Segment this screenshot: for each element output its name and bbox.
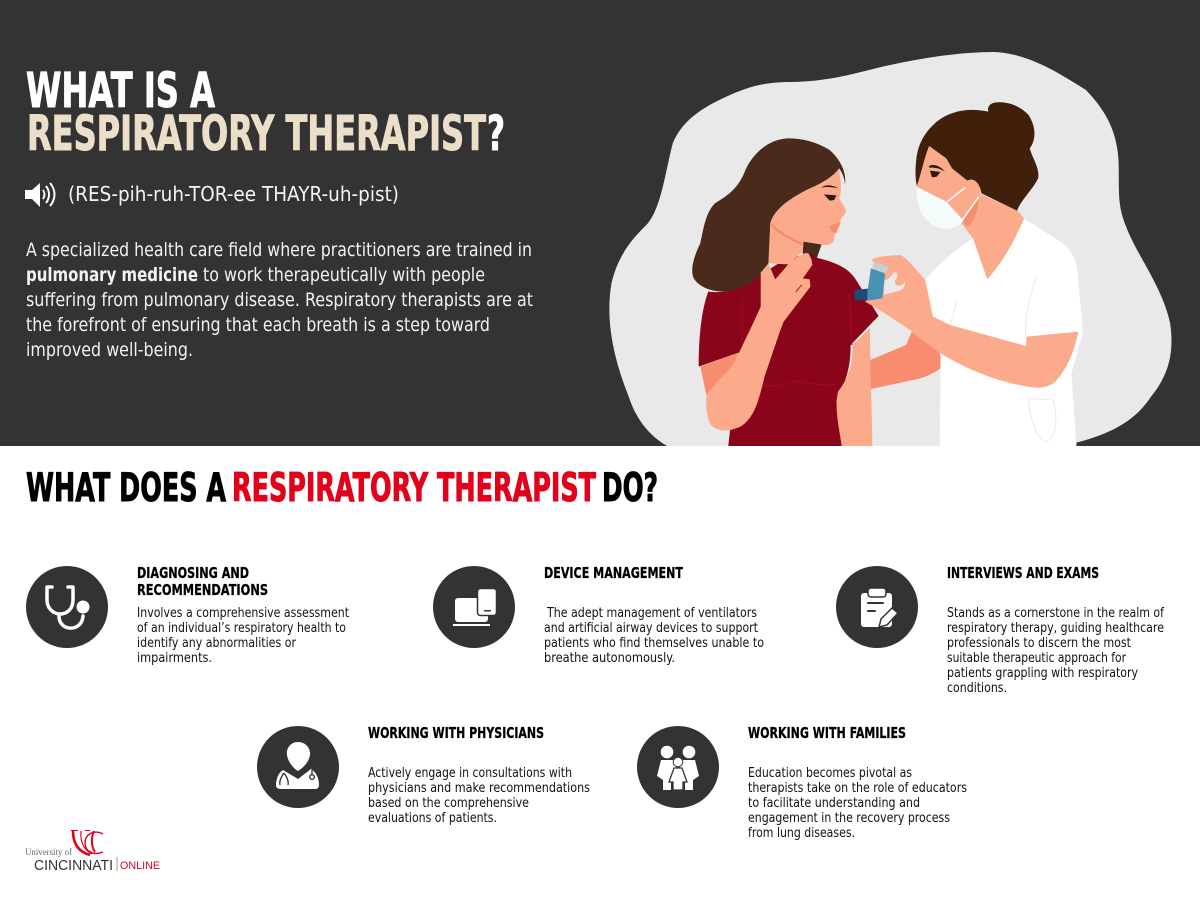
description: breathe autonomously.	[544, 651, 675, 666]
section heading	[26, 466, 658, 511]
nurse uniform	[925, 218, 1083, 447]
description: and artificial airway devices to support	[544, 621, 758, 636]
panel: device management	[433, 564, 764, 666]
section heading: DO?	[602, 466, 658, 511]
description: Stands as a cornerstone in the realm of	[947, 606, 1164, 621]
description: evaluations of patients.	[368, 811, 497, 826]
online text: ONLINE	[120, 860, 160, 872]
title: WHAT IS A	[26, 63, 215, 119]
icon: family	[637, 726, 719, 808]
description	[748, 766, 967, 841]
intro paragraph: A specialized health care field where practitioners are trained in	[26, 239, 532, 261]
title: RESPIRATORY THERAPIST	[27, 106, 486, 162]
description: from lung diseases.	[748, 826, 855, 841]
heading: WORKING WITH PHYSICIANS	[368, 724, 544, 742]
gap between fingers	[884, 273, 905, 295]
patient jaw shadow	[771, 223, 804, 245]
icon: devices	[433, 566, 515, 648]
university text: University of	[25, 847, 72, 857]
patient lips	[829, 222, 841, 233]
heading: DEVICE MANAGEMENT	[544, 564, 684, 582]
description: suitable therapeutic approach for	[947, 651, 1127, 666]
patient back hair strand	[802, 242, 822, 258]
description: professionals to discern the most	[947, 636, 1131, 651]
patient hair	[692, 138, 845, 292]
uniform details	[950, 275, 1056, 441]
description: physicians and make recommendations	[368, 781, 590, 796]
panel: working with families	[637, 724, 967, 841]
nurse hand and near arm	[865, 255, 1078, 388]
section heading: RESPIRATORY THERAPIST	[232, 466, 596, 511]
description: Involves a comprehensive assessment	[137, 606, 349, 621]
nurse neck	[962, 190, 1024, 279]
description: therapists take on the role of educators	[748, 781, 967, 796]
heading: DIAGNOSING AND	[137, 564, 249, 582]
description	[368, 766, 590, 826]
illustration: therapist and patient	[609, 52, 1171, 447]
intro paragraph: to work therapeutically with people	[203, 264, 485, 286]
heading: INTERVIEWS AND EXAMS	[947, 564, 1099, 582]
panel: diagnosing and recommendations	[26, 564, 349, 666]
description: patients who find themselves unable to	[544, 636, 764, 651]
panel: working with physicians	[257, 724, 590, 826]
heading: WORKING WITH FAMILIES	[748, 724, 906, 742]
nurse neck shadow	[962, 198, 979, 227]
description: of an individual’s respiratory health to	[137, 621, 346, 636]
icon: speaker	[25, 183, 54, 207]
description: Education becomes pivotal as	[748, 766, 912, 781]
pronunciation: (RES-pih-ruh-TOR-ee THAYR-uh-pist)	[68, 182, 399, 206]
patient right arm	[837, 328, 872, 447]
intro paragraph: the forefront of ensuring that each breath is a step toward	[26, 314, 490, 336]
inhaler	[854, 262, 889, 301]
description: based on the comprehensive	[368, 796, 529, 811]
intro paragraph: suffering from pulmonary disease. Respiratory therapists are at	[26, 289, 533, 311]
intro paragraph: improved well-being.	[26, 339, 193, 361]
title: ?	[487, 106, 505, 162]
heading: RECOMMENDATIONS	[137, 581, 268, 599]
logo: University of Cincinnati Online	[25, 830, 160, 874]
logo mark	[71, 830, 103, 855]
description: Actively engage in consultations with	[368, 766, 572, 781]
icon: doctor	[257, 726, 339, 808]
dress seams	[742, 293, 852, 386]
mask straps	[947, 187, 979, 221]
panel: interviews and exams	[836, 564, 1164, 696]
description: engagement in the recovery process	[748, 811, 950, 826]
nurse hair	[916, 102, 1038, 211]
description: impairments.	[137, 651, 212, 666]
patient hand and forearm	[706, 253, 812, 430]
patient eye	[821, 185, 838, 201]
icon: stethoscope	[26, 566, 108, 648]
description: patients grappling with respiratory	[947, 666, 1138, 681]
nurse face	[917, 146, 981, 224]
patient dress	[699, 253, 879, 447]
finger gap	[796, 285, 802, 292]
description	[137, 606, 349, 666]
description	[544, 606, 764, 666]
nurse eye	[929, 165, 945, 177]
icon: clipboard	[836, 566, 918, 648]
heading	[137, 564, 268, 599]
description: to facilitate understanding and	[748, 796, 920, 811]
panel: dark hero	[0, 0, 1200, 447]
section heading: WHAT DOES A	[26, 466, 226, 511]
title	[26, 63, 505, 162]
description: The adept management of ventilators	[546, 606, 757, 621]
description	[947, 606, 1164, 696]
cincinnati text: CINCINNATI	[34, 857, 113, 874]
patient upper arm shade	[700, 353, 739, 398]
nurse mask	[916, 187, 964, 229]
intro paragraph: pulmonary medicine	[26, 264, 198, 286]
description: respiratory therapy, guiding healthcare	[947, 621, 1164, 636]
description: identify any abnormalities or	[137, 636, 297, 651]
description: conditions.	[947, 681, 1007, 696]
patient face and neck	[768, 168, 846, 264]
intro paragraph	[26, 239, 533, 361]
nurse far arm	[870, 332, 941, 389]
